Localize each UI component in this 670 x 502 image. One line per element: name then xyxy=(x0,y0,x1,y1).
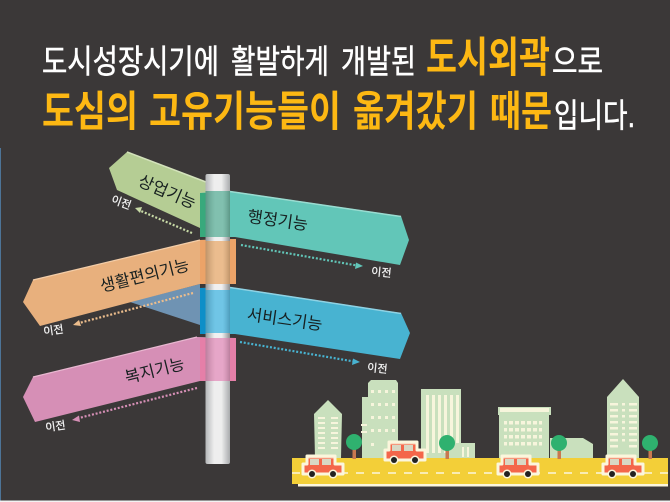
arrow: 생활편의기능 이전 xyxy=(43,293,193,338)
sign: 상업기능: 상업기능 xyxy=(135,171,199,213)
title line 2: 때문 xyxy=(490,88,552,135)
arrow: 생활편의기능 이전: 이전 xyxy=(43,323,64,338)
car 4 xyxy=(603,456,643,478)
tree 4 xyxy=(642,435,658,459)
sign: 생활편의기능 xyxy=(23,239,236,326)
title line 1: 개발된 xyxy=(341,43,416,80)
arrow: 상업기능 이전 xyxy=(109,193,192,233)
title line 1: 도시외곽 xyxy=(426,34,550,81)
sign: 상업기능 xyxy=(109,152,206,232)
sign: 복지기능: 복지기능 xyxy=(123,354,186,387)
sign: 복지기능 xyxy=(23,337,236,422)
pole xyxy=(206,174,230,464)
title xyxy=(42,34,635,135)
title line 2: 고유기능들이 xyxy=(149,88,341,135)
building 1 xyxy=(314,400,342,458)
sign: 서비스기능 xyxy=(130,284,410,359)
sign: 생활편의기능: 생활편의기능 xyxy=(98,255,191,296)
arrow: 복지기능 이전 xyxy=(45,388,197,434)
building 5 xyxy=(607,379,639,458)
arrow: 서비스기능 이전 xyxy=(240,342,388,376)
arrow: 복지기능 이전: 이전 xyxy=(45,419,66,434)
signpost xyxy=(23,152,410,464)
city illustration xyxy=(292,379,668,486)
arrow: 행정기능 이전: 이전 xyxy=(371,265,392,280)
sign: 행정기능: 행정기능 xyxy=(246,207,309,234)
title line 2: 입니다. xyxy=(554,97,635,134)
arrow: 서비스기능 이전: 이전 xyxy=(367,361,388,376)
tree 2 xyxy=(439,435,455,459)
arrow: 행정기능 이전 xyxy=(241,245,392,280)
sign: 서비스기능: 서비스기능 xyxy=(246,305,324,334)
title line 1: 활발하게 xyxy=(231,43,329,80)
car 3 xyxy=(498,456,538,478)
title line 2: 도심의 xyxy=(42,88,138,135)
tree 1 xyxy=(346,434,362,459)
tree 3 xyxy=(551,435,567,459)
title line 1: 으로 xyxy=(552,43,603,80)
car 2 xyxy=(385,442,425,464)
sign: 행정기능 xyxy=(200,191,409,265)
arrow: 상업기능 이전: 이전 xyxy=(109,193,133,212)
building 4 xyxy=(498,407,593,458)
building 3 xyxy=(421,389,475,458)
title line 2: 옮겨갔기 xyxy=(353,88,478,135)
title line 1 xyxy=(42,34,603,81)
building 2 xyxy=(361,380,398,458)
title line 1: 도시성장시기에 xyxy=(42,43,219,80)
car 1 xyxy=(303,456,343,478)
road xyxy=(292,458,668,486)
title line 2 xyxy=(42,88,635,135)
